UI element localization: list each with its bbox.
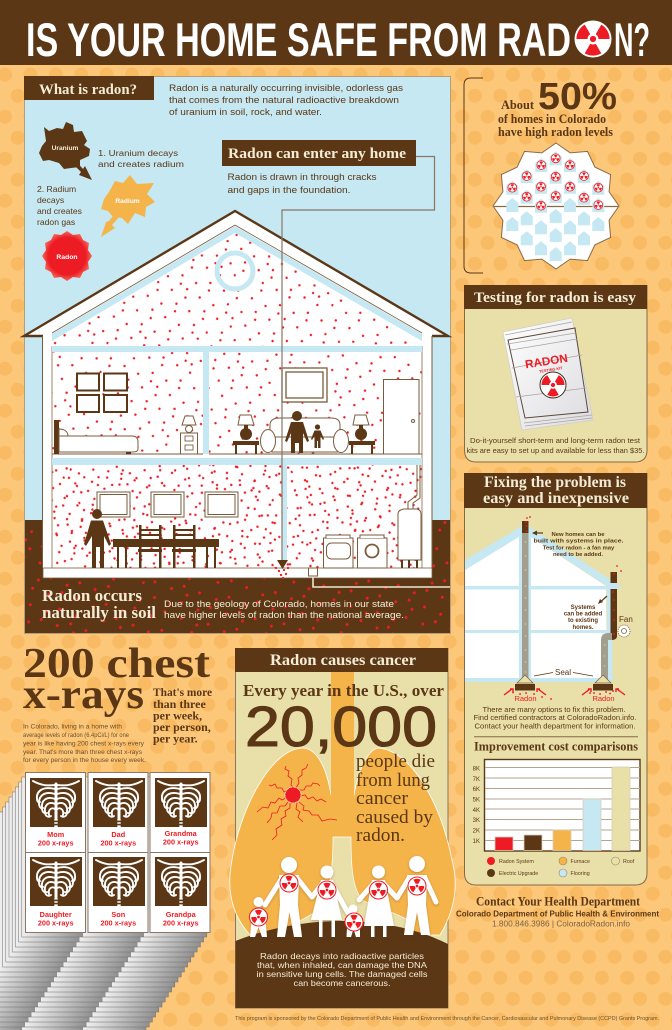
card: daughter: 200 x-rays [38, 918, 74, 928]
callout: new homes: Test for radon - a fan may [543, 545, 615, 551]
radon labels: Radon [592, 694, 615, 703]
bar chart [473, 760, 640, 877]
panel: testing for radon [464, 285, 647, 462]
text: people die: caused by [356, 808, 434, 828]
callout: existing homes: Systems [571, 605, 596, 611]
icon: radon burst: Radon [56, 254, 78, 261]
text: radon decays: that, when inhaled, can damage the DNA [257, 960, 427, 970]
text: radon decays [256, 951, 428, 988]
bars [495, 767, 630, 850]
heading: radon occurs naturally in soil [42, 586, 156, 622]
card: mom: 200 x-rays [38, 838, 74, 848]
stack of x-ray sheets [0, 777, 207, 1030]
icon: radon testing kit [503, 318, 593, 430]
text: step 1 [98, 148, 184, 169]
text: x-ray explanation: year is like having 200 chest x-rays every [23, 740, 145, 748]
text: radon definition: that comes from the natural radioactive breakdown [169, 94, 399, 105]
text: people die: radon. [356, 826, 405, 846]
heading: fixing: easy and inexpensive [483, 490, 629, 507]
text: colorado geology: Due to the geology of Colorado, homes in our state [164, 599, 394, 609]
radon labels [514, 694, 615, 703]
panel: radon causes cancer [230, 648, 455, 1008]
icon: uranium blob and arrow [39, 122, 92, 180]
axis labels: 4K [473, 808, 480, 814]
heading: radon occurs naturally in soil: Radon occurs [42, 586, 143, 605]
dryer [358, 535, 387, 568]
drain pipe [308, 568, 450, 587]
legend: Roof [623, 859, 635, 865]
axis labels: 8K [473, 766, 480, 772]
text: people die: people die [356, 752, 435, 772]
card: daughter [26, 852, 86, 932]
heading: improvement cost comparisons: Improvement cost comparisons [474, 740, 638, 754]
text: homes in colorado: of homes in Colorado [498, 112, 606, 126]
heading: what is radon: What is radon? [39, 82, 137, 98]
icon: radium blob and arrow: Radium [115, 198, 140, 205]
card: grandpa: 200 x-rays [163, 918, 199, 928]
text: step 2: 2. Radium [37, 184, 76, 194]
dining table and chairs [113, 525, 219, 568]
family figures [250, 856, 436, 937]
adult and child on sofa [285, 411, 324, 453]
panel: 50 percent statistic [464, 76, 619, 273]
text: every year: Every year in the U.S., over [243, 681, 444, 700]
roof outline [24, 211, 448, 336]
card: grandma: Grandma [165, 829, 198, 838]
foundation bases [515, 675, 613, 690]
text: colorado geology: have higher levels of radon than the national average. [164, 610, 404, 620]
standing adult [84, 509, 111, 568]
legend: Flooring [570, 871, 590, 877]
panel: testing for radon: Testing for radon is easy [474, 290, 637, 306]
axis labels: 3K [473, 818, 480, 824]
heading: 200 chest x-rays [23, 641, 210, 718]
axis labels: 5K [473, 798, 480, 804]
callout: new homes: built with systems in place. [534, 539, 624, 545]
panel: what is radon and house [24, 76, 450, 634]
heading: what is radon [24, 76, 154, 100]
callout: fan: Fan [619, 615, 633, 624]
upper floor with radon dots [52, 352, 422, 455]
lower floor windows [97, 492, 238, 517]
text: fix options: There are many options to fix this problem. [482, 705, 626, 714]
icon: radon burst [42, 231, 92, 281]
heading: fixing [483, 474, 629, 507]
text: step 2: decays [37, 195, 64, 205]
left vent pipe [522, 517, 530, 683]
text: cracks and gaps: and gaps in the foundation. [228, 185, 350, 195]
text: about 50% [501, 76, 617, 118]
text: x-ray explanation: average levels of radon (6.4pCi/L) for one [23, 732, 129, 739]
icon: radiation symbol as O in title [574, 20, 612, 58]
footer sponsorship note: This program is sponsored by the Colorado Department of Public Health and Environment through the Cancer, Cardiovascular and Pulmonary Disease (CCPD) Grants Program. [235, 1016, 659, 1022]
callout: existing homes: homes. [572, 625, 594, 631]
heading: fixing: Fixing the problem is [484, 474, 626, 491]
radiation badges on family [250, 874, 426, 931]
card: son [88, 852, 148, 932]
red radon arrows [504, 689, 625, 699]
brown ground [236, 921, 448, 1008]
legend [487, 857, 635, 877]
callout: existing homes: to existing [568, 618, 598, 624]
icon: cancer cell with radiating lines [257, 764, 337, 840]
radon labels: Radon [514, 694, 537, 703]
panel: 200 chest x-rays [0, 641, 213, 1030]
callout: seal [534, 668, 593, 677]
text: per week: That's more [153, 685, 213, 699]
icon: radium blob and arrow [101, 175, 155, 237]
legend: Electric Upgrade [499, 871, 538, 877]
card: dad: 200 x-rays [100, 838, 136, 848]
header: radon causes cancer [235, 648, 448, 672]
callout: new homes [532, 530, 624, 558]
text: homes in colorado [498, 112, 613, 139]
arrow: radon entry route [277, 156, 434, 569]
badge with houses [493, 143, 619, 269]
text: per week: per person, [153, 720, 211, 734]
icon: radon testing kit: RADON [524, 353, 569, 371]
text: about 50%: About [501, 97, 535, 112]
wall picture frames [77, 374, 127, 412]
card: grandpa: Grandpa [166, 910, 197, 919]
icon: uranium blob and arrow: Uranium [52, 145, 79, 152]
card: mom: Mom [47, 830, 65, 839]
lamp and table left [233, 415, 259, 454]
callout: existing homes [564, 596, 607, 631]
text: colorado geology [164, 599, 404, 620]
text: radon decays: in sensitive lung cells. The damaged cells [256, 969, 428, 979]
text: radon decays: Radon decays into radioactive particles [260, 951, 425, 961]
card: mom [26, 772, 86, 852]
text: fix options [474, 705, 636, 730]
text: kit description [466, 436, 644, 455]
text: step 1: 1. Uranium decays [98, 148, 178, 158]
text: radon definition: Radon is a naturally occurring invisible, odorless gas [169, 82, 403, 93]
lamp and table right [349, 415, 375, 454]
stat: 20,000: 20,000 [245, 695, 437, 759]
axis labels: 2K [473, 828, 480, 834]
icon: attic round window [217, 253, 253, 289]
bed [54, 420, 138, 454]
text: fix options: Find certified contractors at ColoradoRadon.info. [474, 713, 636, 722]
bracket [464, 78, 483, 273]
text: people die [356, 752, 435, 846]
axis labels: 7K [473, 777, 480, 783]
right vent pipe [601, 566, 621, 683]
legend: Furnace [570, 859, 590, 865]
panel: fixing the problem [464, 473, 647, 885]
text: contact your health department: Contact Your Health Department [476, 894, 641, 909]
text: step 2 [37, 184, 82, 227]
header: radon causes cancer: Radon causes cancer [270, 652, 416, 669]
heading: radon occurs naturally in soil: naturally in soil [42, 603, 156, 622]
card: daughter: Daughter [40, 910, 72, 919]
text: per week: per year. [153, 732, 198, 746]
heading: radon can enter any home [222, 140, 416, 166]
text: x-ray explanation: year. That's more than three chest x-rays [23, 749, 142, 756]
heading: 200 chest x-rays: 200 chest [23, 641, 210, 687]
attic with radon dots [52, 233, 422, 346]
text: step 2: and creates [37, 206, 82, 216]
living room picture [282, 368, 327, 402]
lungs and trachea [230, 672, 455, 945]
card: dad [88, 772, 148, 852]
text: contact your health department: 1.800.846.3986 | ColoradoRadon.info [492, 920, 631, 929]
card: grandma [150, 772, 210, 852]
axis labels [473, 766, 480, 845]
washer [324, 535, 353, 568]
text: about 50%: 50% [538, 76, 617, 118]
dots under entry arrow [276, 568, 288, 578]
text: kit description: Do-it-yourself short-term and long-term radon test [470, 436, 640, 445]
text: x-ray explanation: for every person in the house every week. [23, 757, 146, 764]
card: grandpa [150, 852, 210, 932]
soil [25, 520, 450, 633]
foundation slab [43, 568, 432, 578]
text: homes in colorado: have high radon levels [498, 125, 613, 139]
callout: existing homes: can be added [564, 612, 603, 618]
axis labels: 6K [473, 787, 480, 793]
text: x-ray explanation [23, 724, 146, 764]
text: cracks and gaps [228, 172, 377, 195]
legend: Radon System [499, 859, 534, 865]
house diagram [465, 517, 633, 703]
text: people die: cancer [356, 789, 408, 809]
text: contact your health department: Colorado Department of Public Health & Environment [456, 910, 659, 919]
callout: new homes: need to be added. [553, 552, 603, 558]
house structure [24, 211, 448, 578]
card: son: 200 x-rays [100, 918, 136, 928]
text: per week [153, 685, 213, 746]
text: x-ray explanation: In Colorado, living in a home with [23, 724, 123, 730]
sofa [260, 418, 348, 452]
text: contact your health department [456, 894, 659, 929]
water heater [398, 465, 421, 568]
text: fix options: Contact your health department for information. [474, 722, 636, 730]
text: radon decays: can become cancerous. [294, 978, 390, 988]
heading: 200 chest x-rays: x-rays [23, 672, 144, 718]
lower floor with dense radon dots [52, 465, 422, 568]
text: people die: from lung [356, 771, 430, 791]
text: per week: per week, [153, 708, 202, 722]
callout: seal: Seal [555, 668, 571, 677]
text: radon definition: of uranium in soil, rock, and water. [169, 106, 322, 117]
text: radon definition [169, 82, 403, 117]
callout: new homes: New homes can be [551, 532, 605, 538]
text: step 1: and creates radium [98, 159, 184, 169]
text: cracks and gaps: Radon is drawn in through cracks [228, 172, 377, 182]
card: dad: Dad [111, 830, 125, 839]
icon: radon testing kit: TESTING KIT [539, 366, 563, 374]
text: step 2: radon gas [37, 217, 75, 227]
callout: fan [618, 615, 633, 637]
nightstand with lamp [180, 416, 198, 454]
door [384, 380, 419, 454]
text: kit description: kits are easy to set up and available for less than $35. [466, 446, 644, 455]
heading: radon can enter any home: Radon can enter any home [228, 146, 406, 162]
axis labels: 1K [473, 839, 480, 845]
card: grandma: 200 x-rays [163, 838, 199, 846]
card: son: Son [111, 910, 125, 919]
text: per week: than three [153, 697, 206, 711]
